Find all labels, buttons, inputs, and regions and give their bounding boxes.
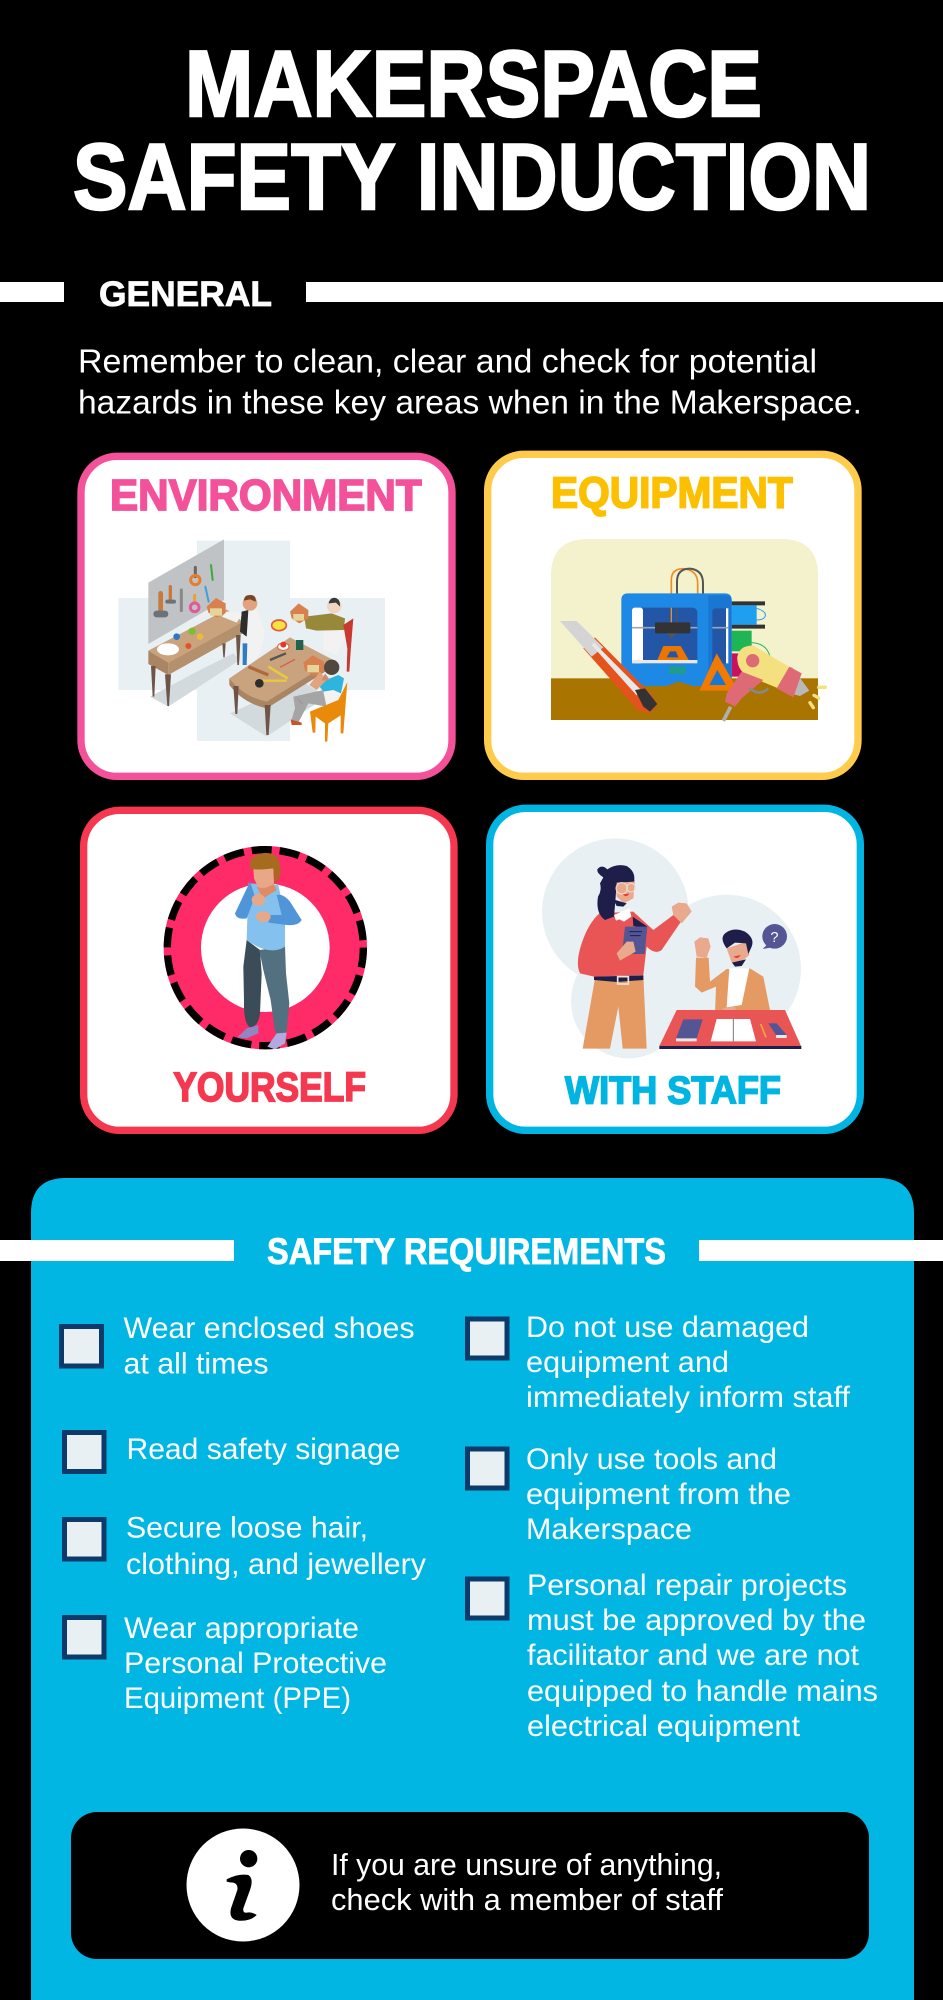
illustration: workshop <box>118 539 385 742</box>
checklist: right column: must be approved by the <box>527 1604 866 1637</box>
heading: safety requirements <box>0 1231 943 1272</box>
panel: yourself <box>84 810 454 1130</box>
illustration: 3D printer and tools <box>551 539 825 721</box>
checklist: left column: Wear appropriate <box>124 1612 359 1645</box>
title: MAKERSPACE <box>185 31 762 136</box>
callout: check with staff: check with a member of staff <box>331 1883 724 1917</box>
checklist: left column: Read safety signage <box>126 1433 400 1466</box>
checklist: left column: at all times <box>124 1348 268 1380</box>
checklist: left column <box>62 1312 426 1715</box>
checklist: left column: clothing, and jewellery <box>126 1548 426 1581</box>
checklist: right column: electrical equipment <box>527 1710 801 1743</box>
section heading: general: GENERAL <box>99 275 272 314</box>
intro text: hazards in these key areas when in the Makerspace. <box>78 384 862 420</box>
panel: environment <box>81 456 452 776</box>
illustration: teacher and student <box>542 838 801 1058</box>
callout: check with staff <box>71 1812 869 1959</box>
checklist: right column: Do not use damaged <box>526 1311 809 1344</box>
callout: check with staff: If you are unsure of anything, <box>331 1848 722 1882</box>
heading: equipment: EQUIPMENT <box>551 470 793 518</box>
heading: environment: ENVIRONMENT <box>110 472 422 520</box>
checklist: right column: Only use tools and <box>526 1443 777 1476</box>
heading: safety requirements: SAFETY REQUIREMENTS <box>267 1231 666 1272</box>
checklist: right column <box>468 1311 878 1743</box>
checklist: left column: Equipment (PPE) <box>124 1682 351 1715</box>
checklist: right column: equipment and <box>526 1346 729 1379</box>
icon: information <box>186 1828 300 1942</box>
section heading: general <box>0 275 943 314</box>
checklist: left column: Secure loose hair, <box>126 1512 368 1544</box>
intro text <box>78 342 862 420</box>
title <box>73 31 871 229</box>
checklist: right column: equipment from the <box>526 1478 791 1511</box>
heading: with staff: WITH STAFF <box>565 1069 781 1113</box>
intro text: Remember to clean, clear and check for potential <box>78 342 817 380</box>
panel: equipment <box>488 454 858 776</box>
checklist: right column: immediately inform staff <box>526 1381 851 1414</box>
checklist: right column: Makerspace <box>526 1513 692 1546</box>
checklist: left column: Wear enclosed shoes <box>124 1312 414 1345</box>
panel: safety requirements <box>0 1178 943 2000</box>
checklist: left column: Personal Protective <box>124 1647 387 1680</box>
illustration: person in circle <box>164 846 367 1049</box>
checklist: right column: Personal repair projects <box>527 1569 847 1602</box>
checklist: right column: equipped to handle mains <box>527 1675 878 1708</box>
heading: yourself: YOURSELF <box>173 1064 366 1110</box>
panel: with staff <box>490 808 860 1130</box>
checklist: right column: facilitator and we are not <box>527 1639 860 1672</box>
illustration: teacher and student: ? <box>770 930 778 946</box>
